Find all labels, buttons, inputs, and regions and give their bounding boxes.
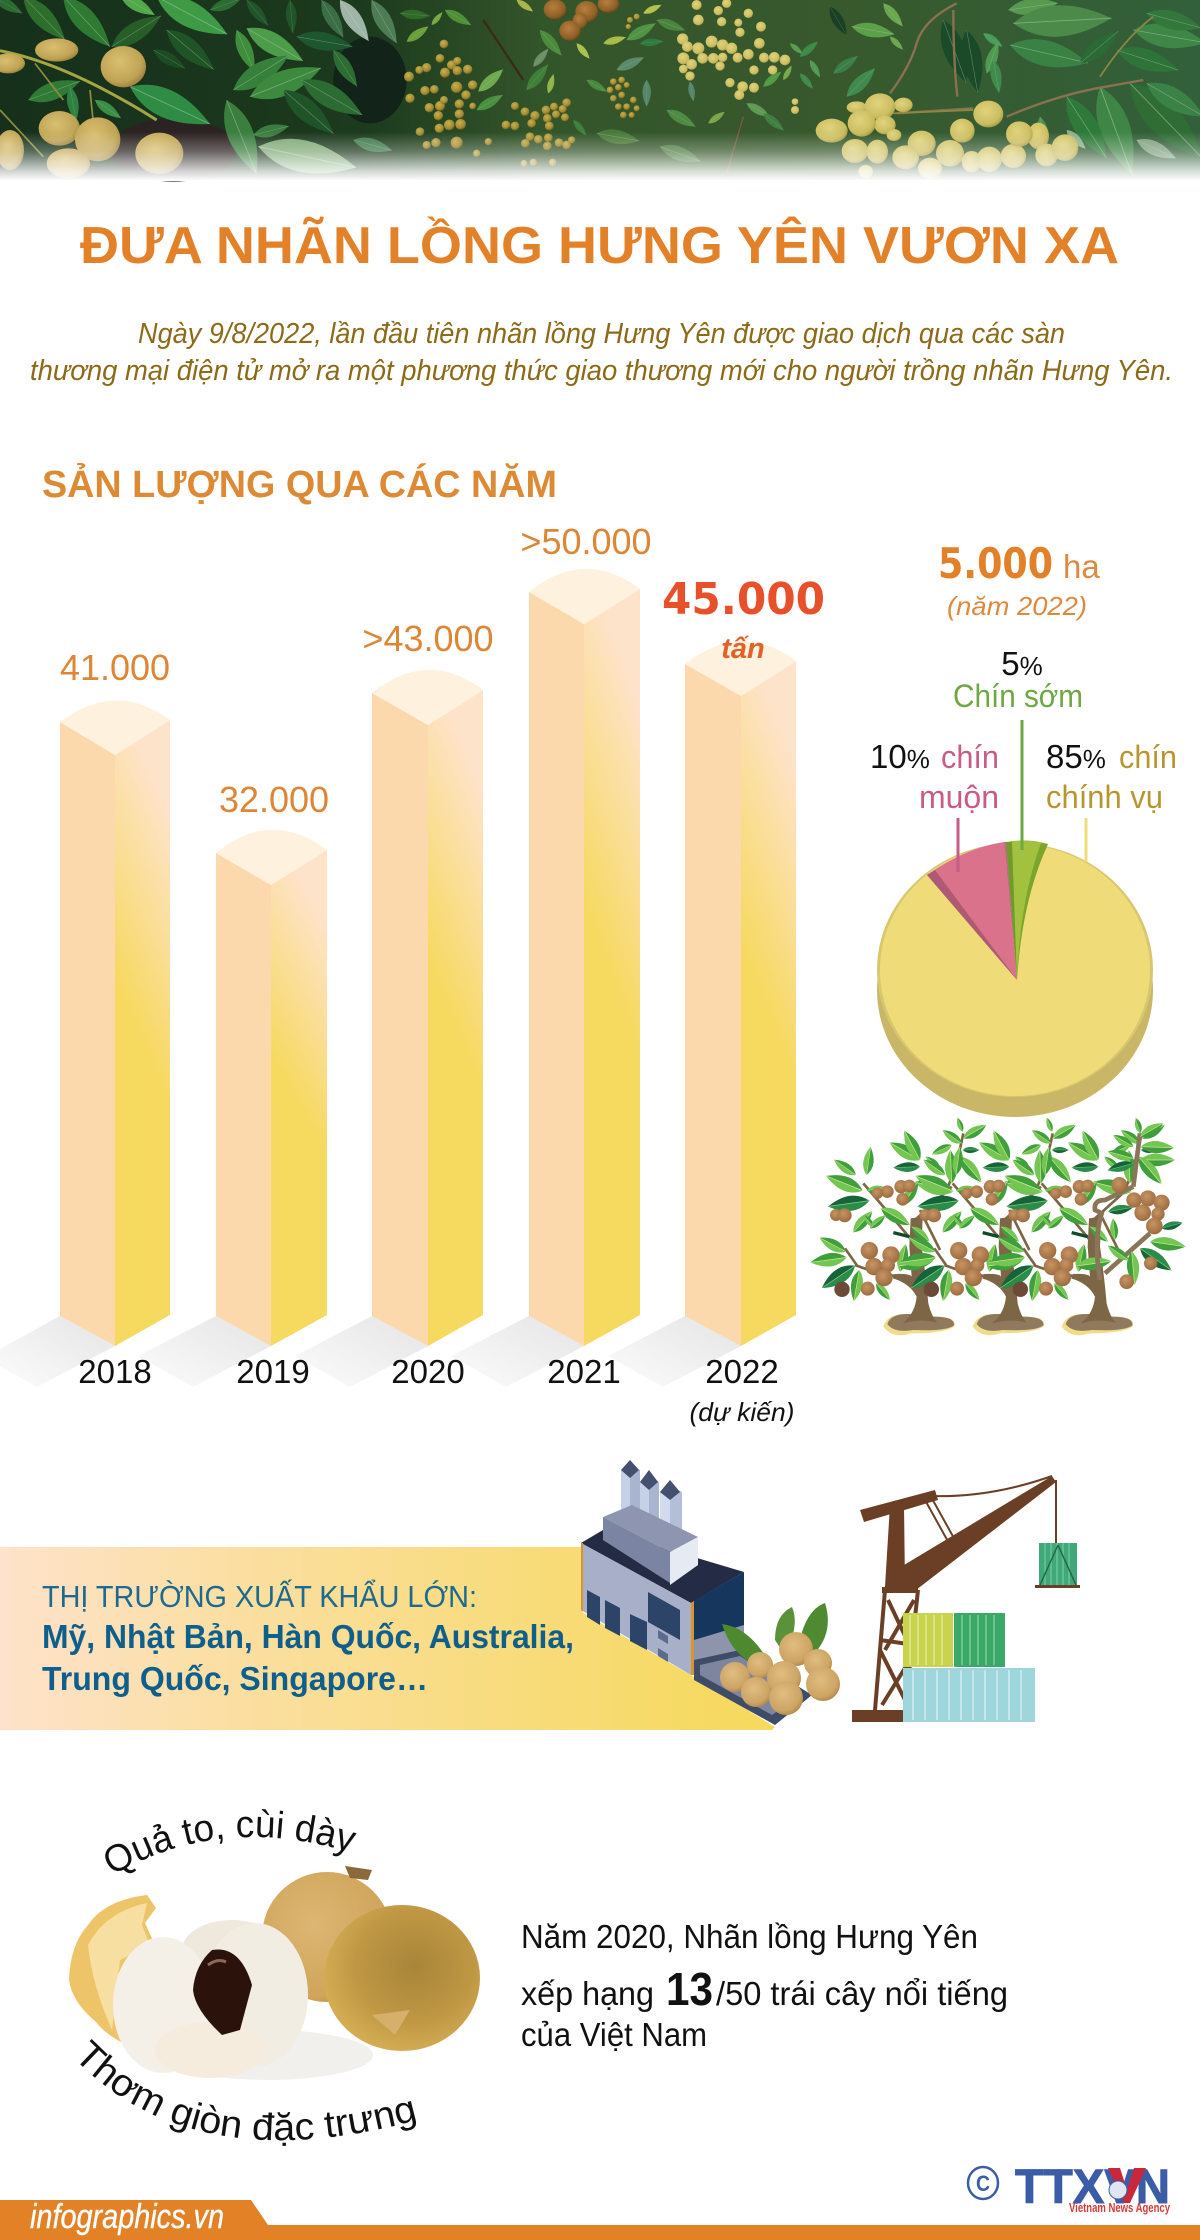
bar 2021	[520, 521, 652, 1390]
title: ĐƯA NHÃN LỒNG HƯNG YÊN VƯƠN XA	[80, 216, 1119, 275]
opening	[694, 1572, 744, 1675]
pie label: 10% late: 10%	[870, 738, 930, 775]
export market text	[42, 1579, 574, 1697]
conveyor	[694, 1650, 812, 1725]
leader line: early	[1020, 720, 1024, 850]
area figure: 5.000 ha: 5.000	[938, 539, 1053, 588]
highlighted value: 45.000 tấn: 45.000	[662, 574, 825, 625]
bar 2020: >43.000	[362, 618, 494, 659]
footer bar: infographics.vn	[30, 2198, 224, 2236]
ranking text: 13	[666, 1963, 713, 2015]
pie label: 5% early: 5%	[1001, 645, 1043, 682]
pie label: 5% early: Chín sớm	[953, 678, 1083, 714]
bar 2020	[362, 618, 494, 1390]
bar 2019	[216, 779, 329, 1390]
pie label: 85% main season: chính vụ	[1046, 779, 1163, 815]
area figure: 5.000 ha: ha	[1063, 548, 1100, 585]
logo: TTXVN: C	[976, 2171, 990, 2196]
pie label: 85% main season	[1046, 738, 1177, 815]
leader line: late	[956, 818, 960, 872]
bar 2019: 2019	[236, 1353, 310, 1390]
export market text: Trung Quốc, Singapore…	[42, 1660, 428, 1697]
footer bar	[0, 2198, 1200, 2240]
pie label: 85% main season: 85%	[1046, 738, 1106, 775]
curved text: big fruit thick flesh: Quả to, cùi dày	[105, 1809, 357, 1874]
bar 2021: 2021	[547, 1353, 621, 1390]
windows	[587, 1590, 647, 1650]
curved text: crisp fragrance: Thơm giòn đặc trưng	[80, 2039, 416, 2146]
intro text: Ngày 9/8/2022, lần đầu tiên nhãn lồng Hưng Yên được giao dịch qua các sàn	[138, 318, 1065, 350]
ranking text: Năm 2020, Nhãn lồng Hưng Yên	[521, 1918, 978, 1955]
crane	[852, 1476, 1056, 1722]
ranking text: /50 trái cây nổi tiếng	[716, 1975, 1008, 2012]
section heading: output by year: SẢN LƯỢNG QUA CÁC NĂM	[42, 462, 557, 506]
pie label: 5% early	[953, 645, 1083, 714]
wall	[581, 1543, 691, 1675]
header photo: longan orchard	[0, 0, 1200, 183]
highlighted value: 45.000 tấn: tấn	[721, 633, 765, 665]
illustration: longan trees	[809, 1117, 1187, 1335]
front fruit	[324, 1905, 480, 2051]
pie label: 10% late: chín	[941, 739, 999, 775]
export market text: Mỹ, Nhật Bản, Hàn Quốc, Australia,	[42, 1618, 574, 1655]
logo: TTXVN: TTXVN	[1015, 2161, 1170, 2214]
slice: late ripening 10%	[927, 842, 1017, 980]
highlighted value: 45.000 tấn	[662, 574, 825, 665]
area figure: 5.000 ha	[938, 539, 1100, 621]
bar chart: output 2018-2022	[0, 521, 796, 1427]
roof	[581, 1530, 744, 1603]
bar 2018: 41.000	[60, 647, 170, 688]
photo: longan fruits	[69, 1866, 480, 2080]
slice: early ripening 5%	[1006, 840, 1048, 980]
bar 2022: (dự kiến)	[690, 1397, 794, 1427]
chimneys	[621, 1460, 682, 1545]
bar 2020: 2020	[391, 1353, 465, 1390]
illustration: port crane and containers	[852, 1476, 1080, 1722]
hanging container	[1035, 1543, 1080, 1588]
flesh and seed	[113, 1920, 308, 2078]
bar 2018	[60, 647, 170, 1390]
bar 2021: >50.000	[520, 521, 652, 562]
bar 2019: 32.000	[219, 779, 329, 820]
ranking text	[521, 1918, 1008, 2053]
ranking text: xếp hạng	[521, 1975, 654, 2012]
leader line: main season	[1084, 818, 1088, 862]
green container	[954, 1613, 1005, 1667]
yellow container	[903, 1613, 953, 1667]
ranking text: của Việt Nam	[521, 2016, 707, 2053]
back fruit	[262, 1866, 392, 2002]
pie label: 10% late	[870, 738, 999, 815]
export market text: THỊ TRƯỜNG XUẤT KHẨU LỚN:	[42, 1579, 477, 1614]
intro text	[30, 318, 1173, 387]
pie chart: harvest season shares	[877, 720, 1153, 1117]
export market band	[0, 1547, 775, 1730]
pie label: 85% main season: chín	[1119, 739, 1177, 775]
cyan container	[903, 1668, 1035, 1722]
upper block	[603, 1505, 698, 1552]
bar 2018: 2018	[78, 1353, 152, 1390]
illustration: factory with conveyor	[581, 1460, 840, 1725]
fruit on conveyor	[720, 1603, 840, 1715]
bar 2022: 2022	[705, 1353, 779, 1390]
area figure: 5.000 ha: (năm 2022)	[947, 591, 1087, 621]
bar 2022	[685, 641, 796, 1427]
pie label: 10% late: muộn	[919, 779, 999, 815]
open shell	[69, 1895, 156, 2050]
